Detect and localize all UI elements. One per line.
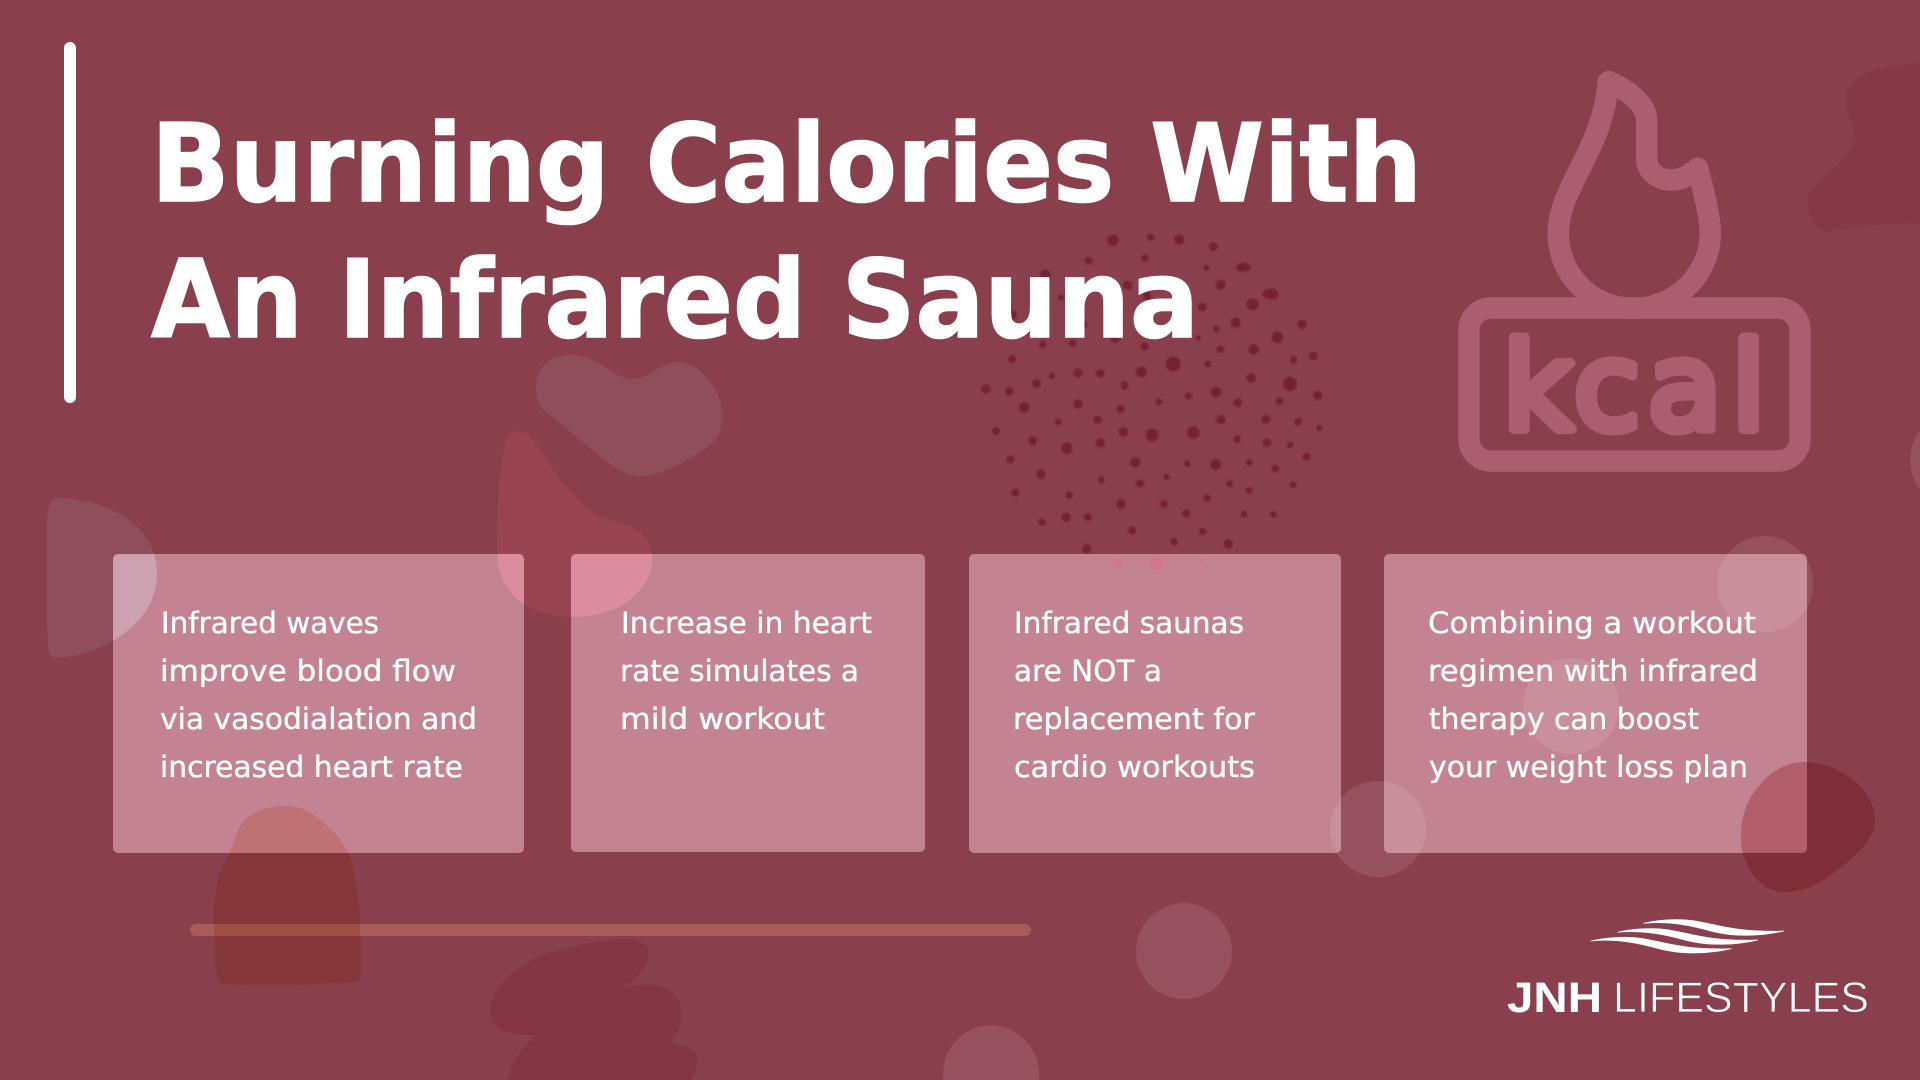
- logo: JNH Lifestyles: [1507, 920, 1869, 1022]
- decorative circles: [943, 412, 1920, 1080]
- card: infrared waves: Infrared waves: [161, 606, 379, 640]
- blob: red shape: [497, 431, 652, 617]
- title: An Infrared Sauna: [151, 238, 1199, 363]
- card: infrared waves: increased heart rate: [160, 750, 463, 784]
- card: heart rate: [571, 554, 925, 852]
- card: infrared waves: [113, 554, 524, 853]
- card: not a replacement: cardio workouts: [1014, 750, 1255, 784]
- card: workout regimen: regimen with infrared: [1428, 654, 1758, 688]
- card: workout regimen: Combining a workout: [1428, 606, 1756, 640]
- card: workout regimen: your weight loss plan: [1429, 750, 1748, 784]
- dots showing through the third card: [1113, 556, 1204, 570]
- title: [151, 102, 1422, 363]
- logo wordmark: JNH: [1507, 974, 1602, 1022]
- card: not a replacement: [969, 554, 1341, 853]
- card: infrared waves: via vasodialation and: [160, 702, 477, 736]
- card: not a replacement: are NOT a: [1014, 654, 1162, 688]
- orange rule: [190, 924, 1031, 936]
- blob: brown arch: [214, 806, 361, 985]
- accent bar beside the title: [64, 42, 76, 403]
- icon: kcal flame: [1469, 82, 1800, 461]
- blob: bottom dark: [490, 939, 698, 1080]
- logo wordmark: LIFESTYLES: [1613, 974, 1869, 1022]
- title: Burning Calories With: [151, 102, 1422, 227]
- card: workout regimen: therapy can boost: [1429, 702, 1699, 736]
- card: workout regimen: [1384, 554, 1807, 853]
- card: heart rate: rate simulates a: [620, 654, 859, 688]
- blob: top right dark: [1808, 63, 1920, 231]
- dotted circle pattern: [981, 234, 1322, 554]
- card: heart rate: Increase in heart: [621, 606, 872, 640]
- blob: light heart shape: [536, 355, 722, 476]
- blob: light left D shape: [46, 498, 157, 658]
- blob: bottom right dark: [1741, 762, 1875, 892]
- card: not a replacement: Infrared saunas: [1014, 606, 1244, 640]
- card: heart rate: mild workout: [620, 702, 825, 736]
- icon: kcal flame: kcal: [1503, 319, 1765, 458]
- card: infrared waves: improve blood flow: [160, 654, 456, 688]
- card: not a replacement: replacement for: [1013, 702, 1255, 736]
- logo waves: [1591, 920, 1784, 953]
